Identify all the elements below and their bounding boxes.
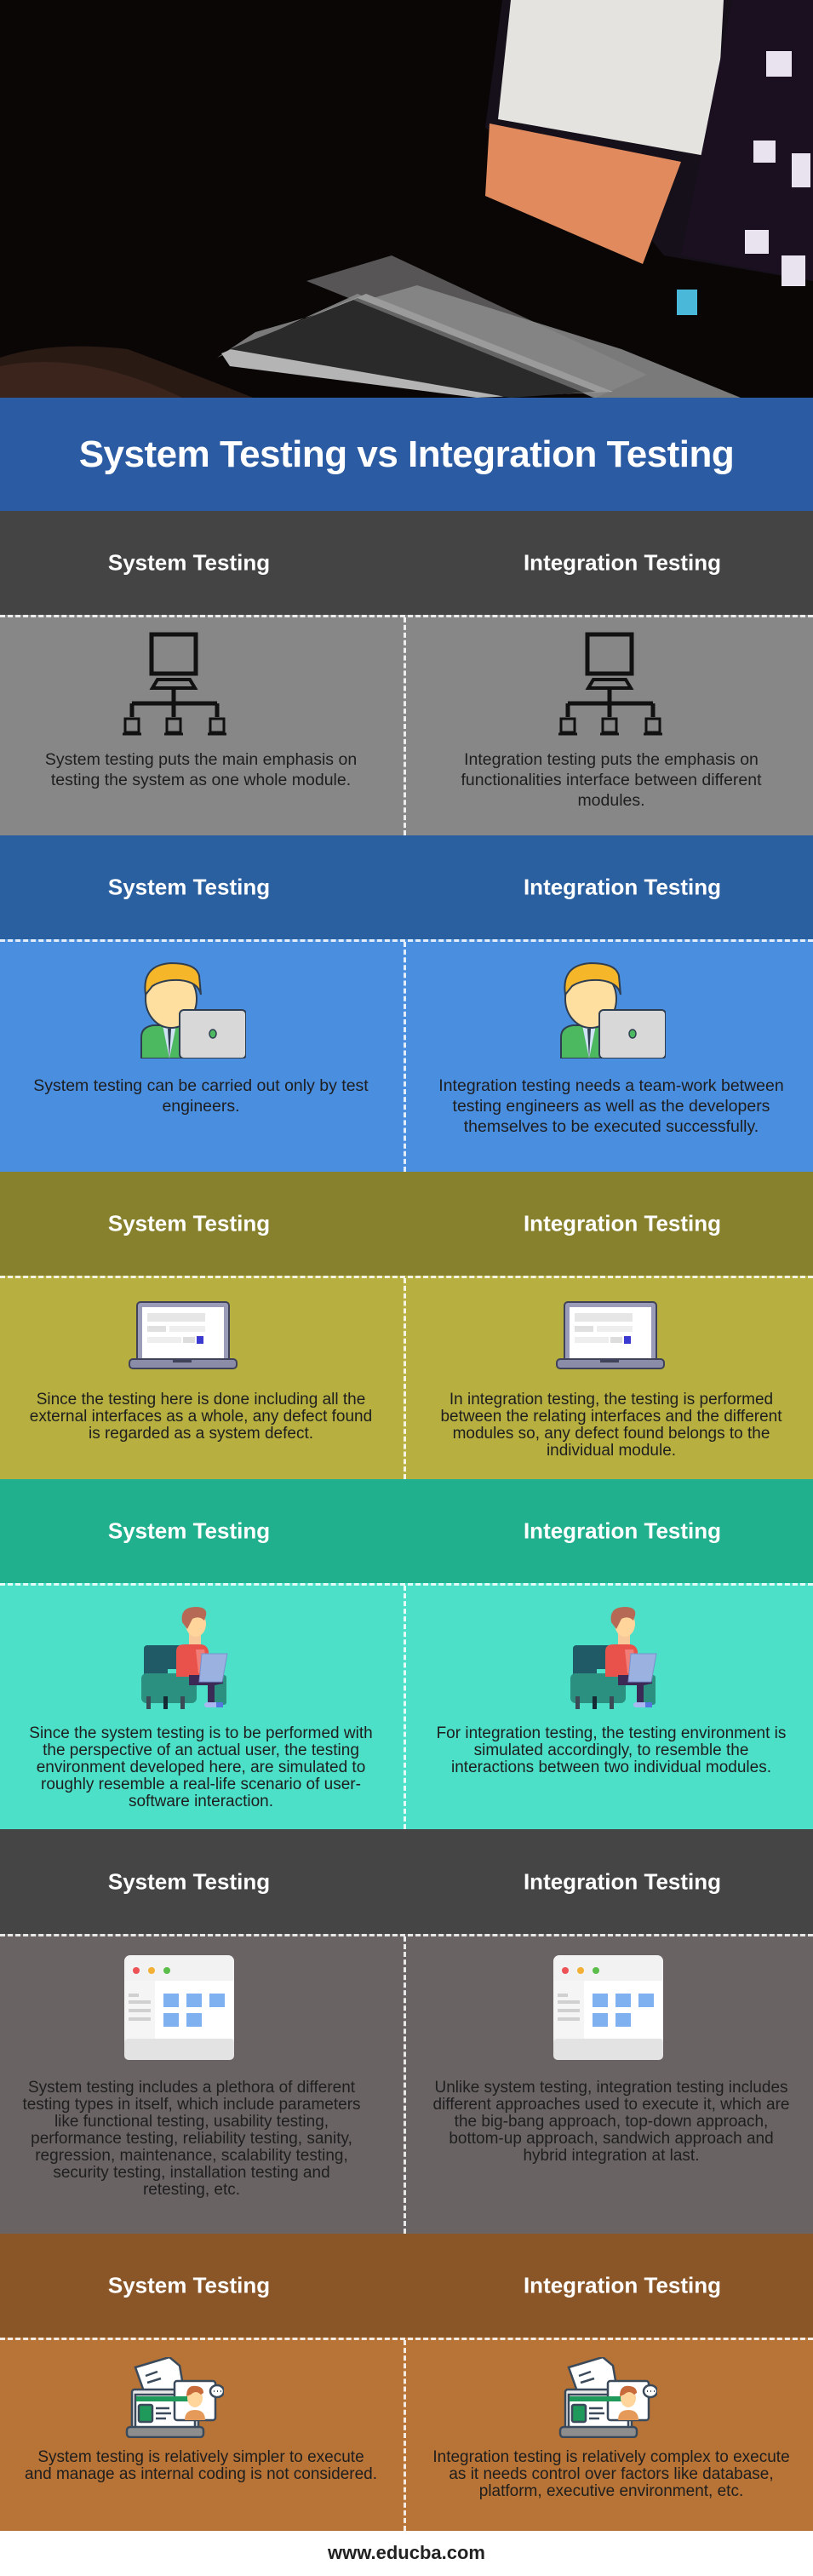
text: simulated environment: For integration testing, the testing environment is simulated accordingly, to resemble the interactions between two individual modules.: [437, 1724, 786, 1776]
icon: engineer left: [140, 962, 246, 1059]
section 6 header: System Testing: [108, 2272, 270, 2298]
icon: laptop right: [556, 1301, 665, 1369]
text: complex: Integration testing is relatively complex to execute as it needs control over factors like database, platform, executive environment, etc.: [432, 2448, 790, 2500]
section 5 header: Integration Testing: [524, 1868, 721, 1894]
text: module defect: In integration testing, the testing is performed between the relating interfaces and the different modules so, any defect found belongs to the individual module.: [440, 1391, 782, 1460]
text: simpler: System testing is relatively simpler to execute and manage as internal coding is not considered.: [25, 2448, 377, 2483]
section 1 content: [0, 615, 813, 835]
section 1 header: Integration Testing: [524, 550, 721, 576]
icon: laptop left: [129, 1301, 238, 1369]
text: user perspective: Since the system testing is to be performed with the perspective of an actual user, the testing environment developed here, are simulated to roughly resemble a real-life scenario of user-software interaction.: [29, 1724, 373, 1810]
section 6 header: Integration Testing: [524, 2272, 721, 2298]
text: system testing emphasis: System testing puts the main emphasis on testing the system as one whole module.: [45, 750, 357, 789]
text: integration testing emphasis: Integration testing puts the emphasis on functionalities interface between different modules.: [461, 750, 762, 810]
icon: engineer right: [560, 962, 666, 1059]
section 4 header: [0, 1479, 813, 1583]
icon: app window right: [553, 1955, 663, 2060]
icon: network right: [558, 632, 662, 736]
section 2 header: System Testing: [108, 874, 270, 899]
section 2 content: [0, 939, 813, 1172]
text: system testing engineers: System testing can be carried out only by test engineers.: [33, 1076, 369, 1116]
title banner: System Testing vs Integration Testing: [79, 433, 734, 475]
section 3 content: [0, 1276, 813, 1479]
section 4 header: Integration Testing: [524, 1517, 721, 1543]
section 6 header: [0, 2234, 813, 2338]
section 1 header: [0, 511, 813, 615]
text: testing types: System testing includes a plethora of different testing types in itself, which include parameters like functional testing, usability testing, performance testing, reliability testing, sanity, regression, maintenance, scalability testing, security testing, installation testing and retesting, etc.: [22, 2079, 361, 2199]
icon: video call right: [558, 2357, 657, 2438]
section 5 header: System Testing: [108, 1868, 270, 1894]
section 3 header: Integration Testing: [524, 1211, 721, 1236]
section 5 header: [0, 1829, 813, 1934]
section 4 content: [0, 1583, 813, 1829]
icon: user in chair left: [141, 1607, 228, 1709]
section 3 header: System Testing: [108, 1211, 270, 1236]
icon: app window left: [124, 1955, 234, 2060]
section 4 header: System Testing: [108, 1517, 270, 1543]
section 3 header: [0, 1172, 813, 1276]
hero photo: laptop keyboard in the dark: [0, 0, 813, 398]
section 2 header: [0, 835, 813, 939]
title banner: [0, 398, 813, 511]
text: integration approaches: Unlike system testing, integration testing includes different approaches used to execute it, which are the big-bang approach, top-down approach, bottom-up approach, sandwich approach and hybrid integration at last.: [433, 2079, 789, 2165]
icon: video call left: [126, 2357, 224, 2438]
section 1 header: System Testing: [108, 550, 270, 576]
section 5 content: [0, 1934, 813, 2234]
icon: user in chair right: [570, 1607, 657, 1709]
text: integration teamwork: Integration testing needs a team-work between testing engineers as well as the developers themselves to be executed successfully.: [438, 1076, 784, 1136]
text: system defect: Since the testing here is done including all the external interfaces as a whole, any defect found is regarded as a system defect.: [30, 1391, 372, 1443]
section 6 content: [0, 2338, 813, 2531]
section 2 header: Integration Testing: [524, 874, 721, 899]
footer url: www.educba.com: [328, 2542, 485, 2563]
icon: network left: [123, 632, 226, 736]
